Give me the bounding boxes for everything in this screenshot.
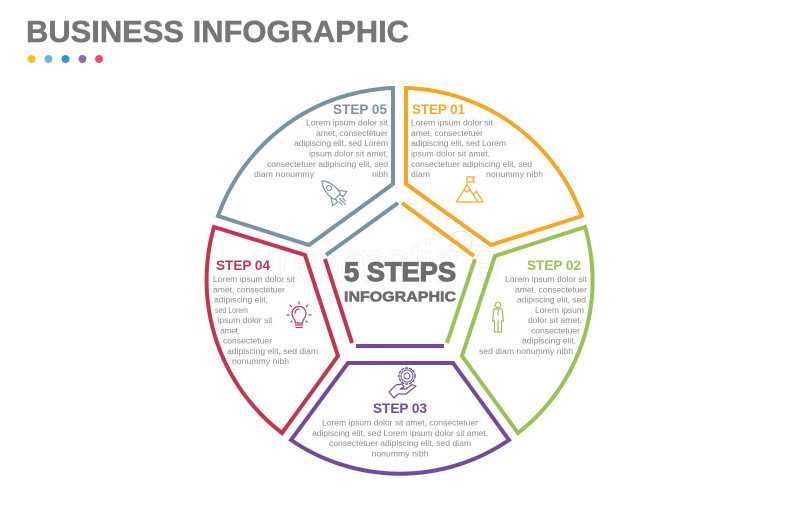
centre heading: 5 STEPS (344, 257, 456, 287)
centre heading: INFOGRAPHIC (344, 290, 457, 306)
step 04 text: Lorem ipsum dolor sit (213, 274, 296, 284)
step 04 text: nonummy nibh (232, 356, 289, 366)
step 05 heading: STEP 05 (333, 101, 387, 117)
step 02 text: sed diam nonummy nibh (479, 346, 573, 356)
step 03 text: adipiscing elit, sed Lorem ipsum dolor sit amet, (312, 428, 488, 438)
step 04 text (213, 274, 318, 366)
icon: hand with gear (389, 368, 416, 398)
colour dots (28, 55, 103, 63)
step 05 text: adipiscing elit, sed Lorem (294, 138, 388, 148)
step 04 text: adipiscing elit, sed diam (227, 346, 318, 356)
step 01 text: ipsum dolor sit amet, (411, 148, 490, 158)
step 05 text: ipsum dolor sit amet, (309, 148, 388, 158)
icon: person (492, 302, 504, 332)
step 04 text: ipsum dolor sit (218, 315, 273, 325)
step 04 text: amet, (220, 326, 240, 336)
step 03 text: Lorem ipsum dolor sit amet, consectetuer (322, 418, 478, 428)
watermark: dreamstime (250, 230, 500, 295)
panel: step 03 (291, 363, 509, 474)
step 05 text (254, 118, 389, 179)
step 04 text: sed Lorem (215, 305, 248, 315)
icon: light bulb (287, 302, 311, 328)
icon: rocket (315, 174, 352, 211)
step 01 text: Lorem ipsum dolor sit (411, 118, 494, 128)
icon: mountain flag (456, 177, 483, 202)
step 02 text: amet, consectetuer (515, 284, 587, 294)
step 02 heading: STEP 02 (527, 257, 581, 273)
step 04 text: consectetuer (223, 336, 272, 346)
inner pentagon segments (325, 203, 475, 346)
step 04 heading: STEP 04 (216, 257, 270, 273)
step 01 text: consectetuer adipiscing elit, sed (411, 159, 532, 169)
step 01 text: diam (411, 169, 430, 179)
step 05 text: diam nonummy (254, 169, 315, 179)
step 05 text: Lorem ipsum dolor sit (306, 118, 389, 128)
step 03 text: nonummy nibh (372, 448, 429, 458)
step 05 text: amet, consectetuer (316, 128, 388, 138)
step 01 text: amet, consectetuer (411, 128, 483, 138)
step 04 text: amet, consectetuer (213, 284, 285, 294)
step 03 heading: STEP 03 (373, 400, 427, 416)
step 01 heading: STEP 01 (412, 101, 465, 117)
step 03 text (312, 418, 488, 458)
panel: step 05 (218, 88, 393, 245)
step 02 text: adipiscing elit, (522, 336, 576, 346)
step 05 text: nibh (372, 169, 388, 179)
step 01 text: adipiscing elit, sed Lorem (411, 138, 506, 148)
step 01 text (411, 118, 543, 179)
title: BUSINESS INFOGRAPHIC (26, 15, 409, 49)
step 04 text: adipiscing elit, (214, 294, 268, 304)
step 02 text: Lorem ipsum dolor sit (505, 274, 588, 284)
panel: step 04 (207, 227, 338, 433)
step 02 text (479, 274, 588, 356)
step 05 text: consectetuer adipiscing elit, sed (267, 159, 388, 169)
step 03 text: consectetuer adipiscing elit, sed diam (329, 438, 471, 448)
step 02 text: Lorem ipsum (535, 305, 584, 315)
step 02 text: adipiscing elit, sed (517, 294, 586, 304)
step 02 text: dolor sit amet, (528, 315, 582, 325)
step 01 text: nonummy nibh (486, 169, 543, 179)
panel: step 01 (406, 88, 582, 245)
step 02 text: consectetuer (531, 326, 580, 336)
panel: step 02 (462, 227, 593, 433)
centre heading (344, 257, 457, 306)
